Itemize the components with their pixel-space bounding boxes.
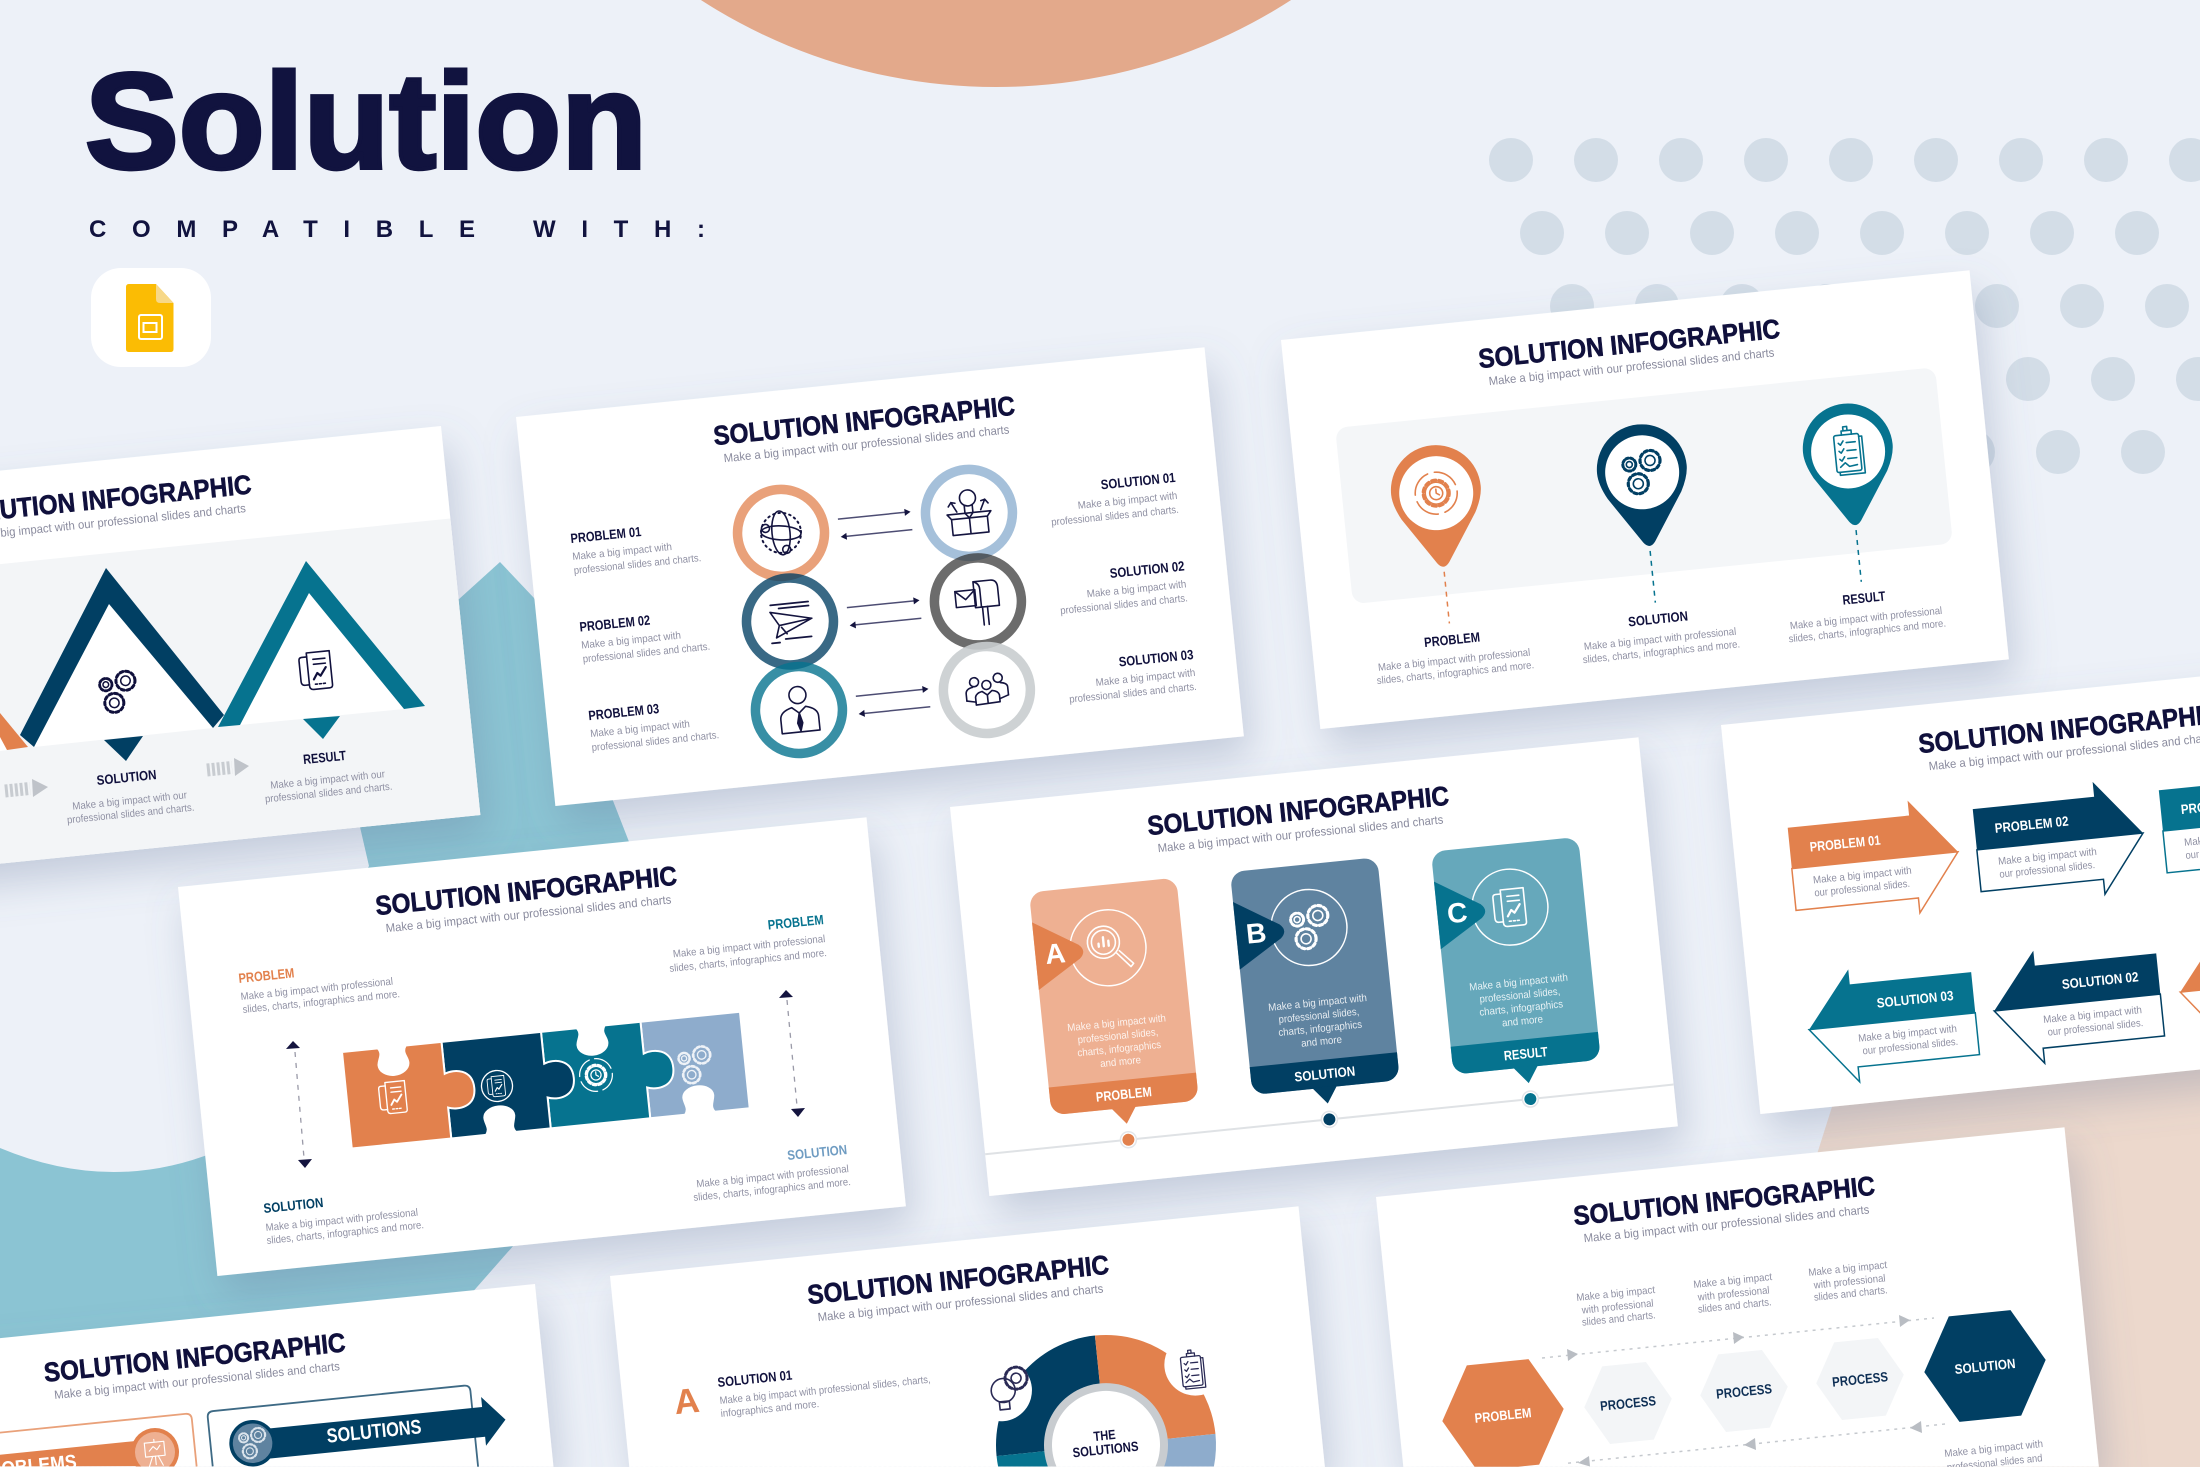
teal background shape — [0, 562, 640, 1420]
panel: cards slide: Make a big impact with our professional slides and charts — [1157, 812, 1444, 855]
arrow: solution 03: Make a big impact with — [1858, 1023, 1958, 1045]
panel: puzzle slide: SOLUTION INFOGRAPHIC — [374, 861, 678, 921]
donut centre label — [1072, 1427, 1139, 1460]
arrow: solution 03: our professional slides. — [1862, 1036, 1959, 1057]
problem labels: Make a big impact with — [581, 630, 682, 652]
problem rings — [733, 465, 1035, 758]
card B: solution — [1230, 857, 1404, 1135]
process descriptions: with professional — [1696, 1284, 1770, 1304]
label: solutions: SOLUTIONS — [326, 1416, 422, 1448]
card B: solution: B — [1245, 917, 1268, 950]
dashed arrow: right — [779, 990, 805, 1117]
panel: problems and solutions slide: SOLUTION INFOGRAPHIC — [42, 1327, 347, 1388]
card A: problem: and more — [1100, 1054, 1142, 1070]
problem labels: Make a big impact with — [572, 541, 673, 563]
hexagon: solution: SOLUTION — [1954, 1356, 2016, 1377]
pin labels: slides, charts, infographics and more. — [1582, 638, 1741, 666]
problem labels — [570, 518, 720, 754]
text: teal problem: PROBLEM — [767, 912, 824, 933]
arrow: problem 02 — [1971, 777, 2149, 907]
subtitle: compatible with: COMPATIBLE WITH: — [89, 216, 705, 243]
card C: result: charts, infographics — [1479, 998, 1564, 1019]
problem labels: professional slides and charts. — [573, 552, 702, 577]
panel: map pins slide: SOLUTION INFOGRAPHIC — [1477, 314, 1781, 374]
text: orange problem — [238, 965, 400, 1016]
panel: donut slide: SOLUTION INFOGRAPHIC — [806, 1250, 1110, 1310]
card A: problem — [1029, 878, 1203, 1155]
solution labels: professional slides and charts. — [1060, 592, 1188, 617]
text: dark solution — [263, 1195, 424, 1247]
panel: problems and solutions slide: Make a big impact with our professional slides and charts — [54, 1359, 340, 1402]
process descriptions: slides and charts. — [1813, 1284, 1888, 1304]
main title: Solution — [85, 45, 647, 197]
process descriptions: slides and charts. — [1581, 1309, 1656, 1329]
card A: problem: professional slides, — [1077, 1026, 1159, 1046]
solution labels: SOLUTION 03 — [1118, 647, 1195, 670]
process descriptions: with professional — [1580, 1297, 1654, 1317]
pin labels: slides, charts, infographics and more. — [1376, 659, 1535, 687]
solution labels: SOLUTION 01 — [1100, 470, 1177, 492]
pin labels: slides, charts, infographics and more. — [1788, 618, 1947, 645]
solution description — [1944, 1438, 2044, 1467]
card B: solution: Make a big impact with — [1268, 992, 1368, 1014]
card C: result: and more — [1502, 1013, 1544, 1029]
arrow: solution 01 — [2175, 920, 2200, 1049]
hexagon: process 1 — [1580, 1360, 1676, 1446]
card C: result: C — [1446, 897, 1469, 929]
card B: solution: charts, infographics — [1278, 1019, 1363, 1039]
puzzle icons — [378, 1081, 407, 1115]
panel: mountains slide: Make a big impact with our — [270, 768, 386, 792]
problem labels: PROBLEM 02 — [579, 613, 651, 635]
dot pattern — [1489, 138, 2200, 474]
donut centre label: THE — [1093, 1427, 1116, 1444]
panel: puzzle slide: Make a big impact with our professional slides and charts — [385, 892, 672, 935]
pin labels: RESULT — [1842, 588, 1887, 608]
process descriptions: Make a big impact — [1808, 1259, 1888, 1279]
panel: mountains slide: professional slides and charts. — [66, 802, 195, 826]
card A: problem: Make a big impact with — [1067, 1012, 1167, 1034]
pin: problem — [1387, 441, 1494, 628]
text: teal problem: Make a big impact with professional — [672, 933, 826, 960]
text: blue solution: Make a big impact with professional — [696, 1163, 849, 1190]
arrow: problem 01: PROBLEM 01 — [1809, 833, 1882, 855]
panel: arrows slide — [1721, 655, 2200, 1114]
donut chart — [966, 1323, 1237, 1467]
orange peak — [0, 713, 28, 750]
arrow: problem 02: Make a big impact with — [1998, 846, 2097, 868]
solution labels: Make a big impact with — [1086, 578, 1187, 600]
panel: problems and solutions slide — [0, 1284, 553, 1467]
solution labels: professional slides and charts. — [1069, 681, 1197, 706]
pin: solution — [1593, 420, 1700, 607]
text: dark solution: SOLUTION — [263, 1195, 324, 1216]
marker triangles — [104, 736, 143, 761]
card C: result: Make a big impact with — [1469, 972, 1569, 994]
badge: problems — [131, 1428, 179, 1467]
text: orange problem: Make a big impact with professional — [240, 976, 394, 1003]
solution description: Make a big impact with — [1944, 1438, 2044, 1460]
panel: cards slide: SOLUTION INFOGRAPHIC — [1146, 781, 1450, 841]
box: problems — [0, 1413, 197, 1467]
solution labels: Make a big impact with — [1077, 490, 1178, 512]
text: blue solution: SOLUTION — [787, 1142, 848, 1163]
panel: hexagon process slide: Make a big impact with our professional slides and charts — [1583, 1202, 1870, 1245]
arrow: problem 01: our professional slides. — [1814, 878, 1911, 899]
hexagon: process 2: PROCESS — [1715, 1381, 1773, 1402]
bar: problems — [0, 1439, 156, 1467]
panel: problem and solution circles slide: SOLUTION INFOGRAPHIC — [712, 391, 1016, 451]
pin labels: PROBLEM — [1423, 630, 1481, 650]
pin labels: Make a big impact with professional — [1583, 626, 1737, 653]
text: orange problem: slides, charts, infographics and more. — [242, 988, 400, 1016]
card A: problem: PROBLEM — [1095, 1084, 1152, 1105]
pin labels: Make a big impact with professional — [1789, 605, 1943, 632]
process descriptions — [1576, 1259, 1888, 1329]
process descriptions: Make a big impact — [1576, 1284, 1656, 1304]
arrow: solution 02: SOLUTION 02 — [2061, 969, 2139, 992]
hexagon: solution — [1919, 1307, 2051, 1425]
card A: problem: A — [1044, 937, 1067, 970]
problem labels: professional slides and charts. — [582, 641, 711, 665]
arrow: solution 02 — [1989, 938, 2166, 1068]
donut centre label: SOLUTIONS — [1072, 1439, 1139, 1460]
arrow: problem 03 — [2157, 758, 2200, 888]
solution labels: SOLUTION 02 — [1109, 558, 1185, 581]
process descriptions: Make a big impact — [1693, 1271, 1773, 1291]
text: teal problem — [669, 912, 827, 975]
dark peak — [20, 568, 224, 747]
solution 01 text — [672, 1367, 931, 1422]
peach semicircle top — [452, 0, 1540, 87]
icon: google slides — [91, 268, 211, 367]
solution labels — [1047, 470, 1198, 706]
puzzle chart — [342, 1012, 750, 1149]
problem labels: PROBLEM 01 — [570, 524, 642, 546]
text: orange problem: PROBLEM — [238, 965, 295, 986]
text: dark solution: Make a big impact with professional — [265, 1207, 419, 1234]
problem labels: professional slides and charts. — [591, 729, 720, 754]
label: solution: SOLUTION — [96, 767, 157, 788]
process arrows — [5, 758, 249, 797]
arrow: problem 01 — [1786, 796, 1964, 925]
hexagon: process 2 — [1696, 1348, 1792, 1434]
hexagon: process 1: PROCESS — [1599, 1393, 1657, 1414]
hexagon: problem — [1437, 1356, 1569, 1467]
panel: problem and solution circles slide — [516, 347, 1244, 806]
bar: solutions — [250, 1395, 508, 1467]
peach panel bottom right — [1790, 1050, 2200, 1467]
panel: hexagon process slide — [1376, 1127, 2099, 1467]
card B: solution: SOLUTION — [1294, 1064, 1356, 1085]
card B: solution: and more — [1301, 1034, 1343, 1050]
panel: cards slide — [950, 737, 1678, 1196]
problem labels: PROBLEM 03 — [588, 701, 660, 723]
process descriptions: with professional — [1812, 1272, 1886, 1292]
arrow: problem 02: our professional slides. — [1999, 859, 2096, 881]
hexagon: process 3: PROCESS — [1831, 1369, 1889, 1390]
arrow: problem 02: PROBLEM 02 — [1994, 814, 2069, 836]
pin labels: SOLUTION — [1627, 608, 1689, 629]
icon: gears — [99, 670, 138, 714]
text: teal problem: slides, charts, infographics and more. — [669, 947, 827, 975]
card C: result: professional slides, — [1479, 986, 1561, 1006]
problem labels: Make a big impact with — [590, 718, 691, 740]
dashed arrow: left — [286, 1041, 312, 1168]
pin backdrop — [1335, 367, 1953, 604]
dashed arrow bottom — [1565, 1421, 1945, 1466]
box: solutions — [207, 1385, 478, 1467]
panel: donut slide — [610, 1206, 1325, 1467]
icon: bulb gear — [989, 1366, 1030, 1411]
text: blue solution — [693, 1142, 851, 1204]
icon: checklist — [1180, 1349, 1206, 1389]
panel: mountains slide — [0, 426, 480, 885]
arrow: solution 02: Make a big impact with — [2043, 1004, 2143, 1026]
teal peak — [218, 561, 425, 727]
arrow: solution 03 — [1803, 957, 1981, 1086]
label: result: RESULT — [302, 748, 347, 767]
connecting arrows — [838, 508, 931, 718]
dashed arrow top — [1542, 1315, 1934, 1361]
solution 01 text: SOLUTION 01 — [717, 1367, 793, 1390]
badge: solutions — [229, 1420, 276, 1467]
solution labels: professional slides and charts. — [1051, 504, 1179, 529]
process descriptions: slides and charts. — [1697, 1296, 1772, 1316]
pin: result — [1799, 399, 1906, 586]
panel: problem and solution circles slide: Make a big impact with our professional slides and charts — [723, 422, 1010, 465]
panel: map pins slide: Make a big impact with our professional slides and charts — [1488, 345, 1775, 388]
solution labels: Make a big impact with — [1095, 667, 1196, 689]
panel: puzzle slide — [178, 817, 906, 1276]
card B: solution: professional slides, — [1278, 1006, 1360, 1026]
arrow: solution 03: SOLUTION 03 — [1876, 988, 1955, 1011]
panel: map pins slide — [1281, 270, 2009, 729]
pin labels — [1373, 583, 1947, 687]
panel: mountains slide: professional slides and charts. — [264, 781, 393, 805]
panel: hexagon process slide: SOLUTION INFOGRAPHIC — [1572, 1171, 1876, 1231]
hexagon: problem: PROBLEM — [1474, 1405, 1532, 1426]
panel: donut slide: Make a big impact with our professional slides and charts — [817, 1281, 1104, 1324]
arrow: problem 01: Make a big impact with — [1813, 865, 1912, 886]
solution 01 text: A — [672, 1381, 701, 1422]
panel: mountains slide: Make a big impact with our — [72, 789, 188, 813]
card C: result — [1431, 837, 1605, 1114]
solution 01 text: Make a big impact with professional slides, charts, — [719, 1374, 931, 1407]
card A: problem: charts, infographics — [1077, 1039, 1162, 1059]
icon: report — [298, 651, 333, 691]
text: dark solution: slides, charts, infographics and more. — [266, 1219, 424, 1247]
arrow: solution 02: our professional slides. — [2047, 1017, 2144, 1039]
pin labels: Make a big impact with professional — [1377, 647, 1531, 674]
hexagon: process 3 — [1812, 1336, 1908, 1422]
solution 01 text: infographics and more. — [720, 1398, 820, 1420]
card C: result: RESULT — [1503, 1044, 1549, 1063]
text: blue solution: slides, charts, infographics and more. — [693, 1176, 851, 1204]
